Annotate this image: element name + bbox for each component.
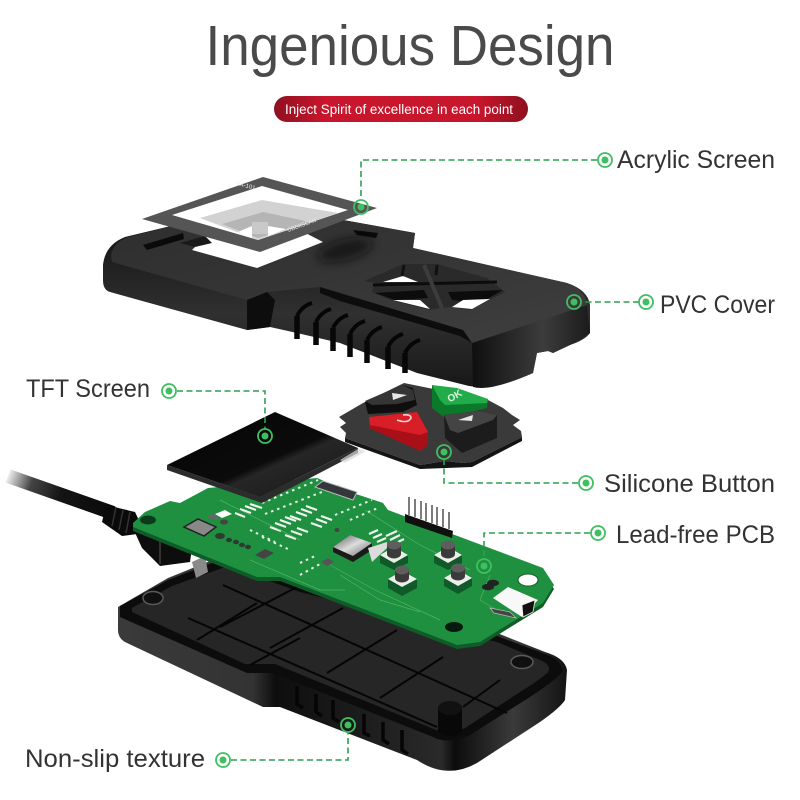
label: PVC cover: PVC Cover (660, 291, 775, 319)
pin header (405, 497, 453, 538)
label: lead-free PCB: Lead-free PCB (616, 521, 775, 549)
floor ribs (188, 585, 507, 727)
acrylic screen: YA-101 (235, 181, 257, 192)
screw post (438, 708, 462, 736)
grey arrow button (444, 411, 497, 453)
window opening (192, 225, 323, 268)
label: non-slip texture (25, 718, 355, 773)
acrylic screen: OBDIISCAN (287, 218, 317, 234)
label: PVC cover (567, 291, 775, 319)
PVC cover (103, 205, 590, 388)
label: TFT screen (26, 375, 272, 443)
X vent (364, 264, 505, 310)
mounting holes (140, 516, 156, 524)
silicone button pad (339, 383, 522, 469)
black arrow button (365, 385, 417, 414)
small chips (184, 510, 499, 590)
label: silicone button (437, 445, 775, 498)
thin traces (220, 500, 500, 620)
tactile switches (380, 540, 472, 596)
grip slots (297, 686, 408, 754)
red back button (369, 412, 428, 451)
title: Ingenious Design (206, 14, 614, 78)
label: lead-free PCB (477, 521, 775, 573)
solder pads (235, 480, 404, 575)
label: TFT screen: TFT Screen (26, 375, 150, 403)
green OK button (432, 385, 488, 418)
label: acrylic screen (354, 146, 775, 214)
flex connector (315, 481, 357, 500)
USB connector (490, 587, 538, 618)
cable (8, 476, 192, 566)
subtitle pill (274, 96, 528, 122)
shadow under acrylic (315, 233, 375, 267)
subtitle pill: Inject Spirit of excellence in each point (285, 102, 513, 117)
metal clips (192, 556, 208, 578)
PCB (133, 478, 554, 649)
bottom shell: non-slip texture (118, 555, 567, 771)
label: non-slip texture: Non-slip texture (25, 745, 205, 773)
screw rings (143, 592, 163, 604)
top slits (143, 233, 184, 250)
TFT screen (167, 412, 366, 503)
label: silicone button: Silicone Button (604, 470, 775, 498)
label: acrylic screen: Acrylic Screen (617, 146, 775, 174)
green OK button: OK (446, 388, 465, 405)
acrylic screen (142, 177, 377, 252)
main processor chip (333, 535, 387, 562)
grip ridges (297, 303, 420, 373)
